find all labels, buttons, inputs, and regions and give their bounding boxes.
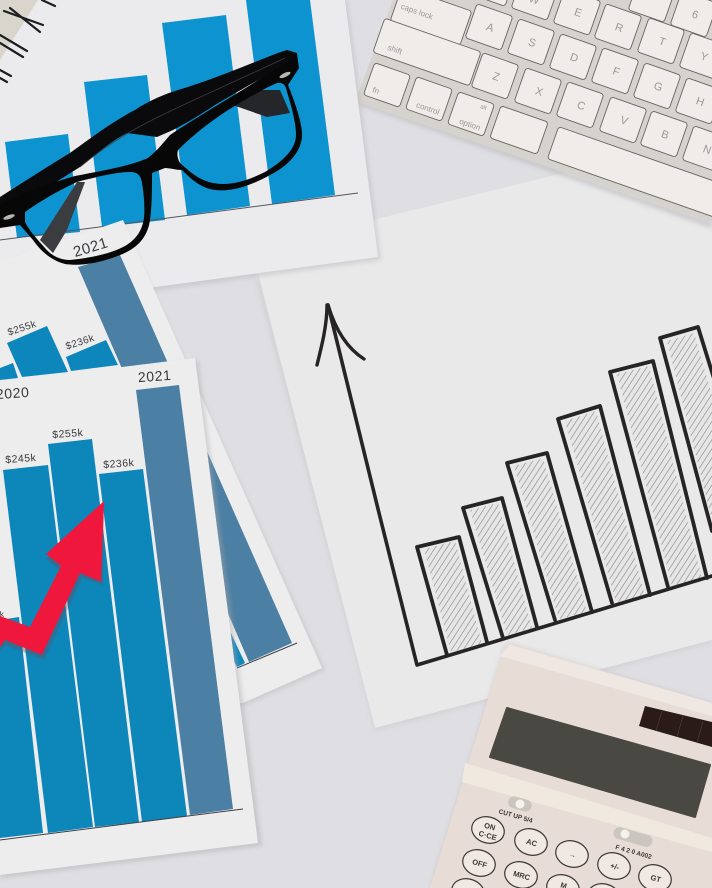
chart labels: $236k	[103, 457, 135, 471]
calculator switches	[498, 795, 654, 861]
hatching inside drawn bars	[424, 333, 712, 652]
dark 2021 bar	[78, 255, 292, 662]
keyboard key legends: B	[660, 128, 670, 142]
panel: computer keyboard	[357, 0, 712, 241]
glasses rivets	[3, 71, 291, 221]
panel: hand drawn chart paper	[252, 135, 712, 731]
icon: red paper arrow	[0, 501, 104, 660]
keyboard key legends: H	[694, 95, 706, 109]
calculator button labels: AC	[525, 837, 539, 849]
keyboard key legends: X	[534, 85, 545, 99]
panel: white calculator	[430, 644, 712, 888]
keyboard key legends: S	[527, 36, 537, 50]
calculator solar cell	[639, 706, 712, 747]
hand drawn bars	[417, 327, 712, 655]
keyboard key legends: E	[573, 6, 583, 20]
calculator switches: F 4 2 0 A002	[615, 844, 653, 861]
chart labels	[0, 367, 172, 619]
keyboard key legends: Y	[699, 50, 710, 64]
panel: sheet two rotated bar chart	[0, 220, 325, 706]
chart labels: $255k	[52, 427, 84, 441]
keyboard key legends: control	[415, 100, 441, 117]
keyboard key legends: C	[575, 99, 587, 113]
panel: sheet three front bar chart	[0, 358, 262, 878]
sheet two value labels	[6, 234, 110, 352]
keyboard key legends: G	[652, 80, 664, 94]
sheet two value labels: 2021	[71, 234, 110, 261]
keyboard key legends: A	[485, 21, 496, 35]
keyboard key legends: Z	[491, 70, 501, 84]
keyboard key legends: shift	[386, 43, 404, 57]
calculator switches: CUT UP 5/4	[498, 808, 534, 825]
keyboard key legends: 6	[690, 8, 700, 22]
sheet two value labels: $255k	[6, 319, 39, 338]
hand drawn arrow axis	[317, 305, 712, 665]
icon: spiral notebook corner	[0, 0, 55, 82]
blue bars	[0, 326, 245, 667]
panel: sheet one with blue bar chart	[0, 0, 381, 312]
calculator button labels: GT	[649, 873, 662, 884]
blue bars	[5, 0, 335, 238]
calculator display	[490, 708, 710, 817]
calculator button labels: MRC	[512, 869, 532, 882]
keyboard key legends: option	[458, 117, 482, 132]
keyboard key legends	[371, 0, 712, 157]
calculator light band	[462, 763, 712, 852]
glasses temple arms	[0, 50, 298, 215]
keyboard key legends: V	[619, 114, 630, 128]
keyboard key legends: T	[657, 35, 667, 49]
bar chart bars	[0, 439, 187, 838]
keyboard key legends: fn	[371, 85, 380, 96]
chart labels: 2021	[137, 367, 172, 385]
glasses front frame	[0, 55, 302, 265]
calculator buttons	[449, 813, 674, 888]
keyboard keys	[363, 0, 712, 241]
calculator button labels: C·CE	[478, 829, 498, 842]
chart labels: $245k	[5, 452, 37, 466]
calculator button labels	[471, 821, 662, 888]
keyboard key legends: R	[613, 21, 625, 35]
calculator button labels: →	[568, 849, 578, 860]
keyboard key legends: F	[611, 65, 621, 79]
sheet two value labels: $236k	[64, 333, 97, 352]
calculator button labels: OFF	[471, 857, 489, 870]
calculator button labels: ON	[483, 821, 496, 832]
keyboard key legends: alt	[479, 104, 488, 112]
keyboard key legends: caps lock	[400, 2, 435, 22]
keyboard key legends: D	[568, 51, 580, 65]
calculator button labels: +/-	[609, 861, 621, 872]
icon: black eyeglasses	[0, 50, 302, 265]
